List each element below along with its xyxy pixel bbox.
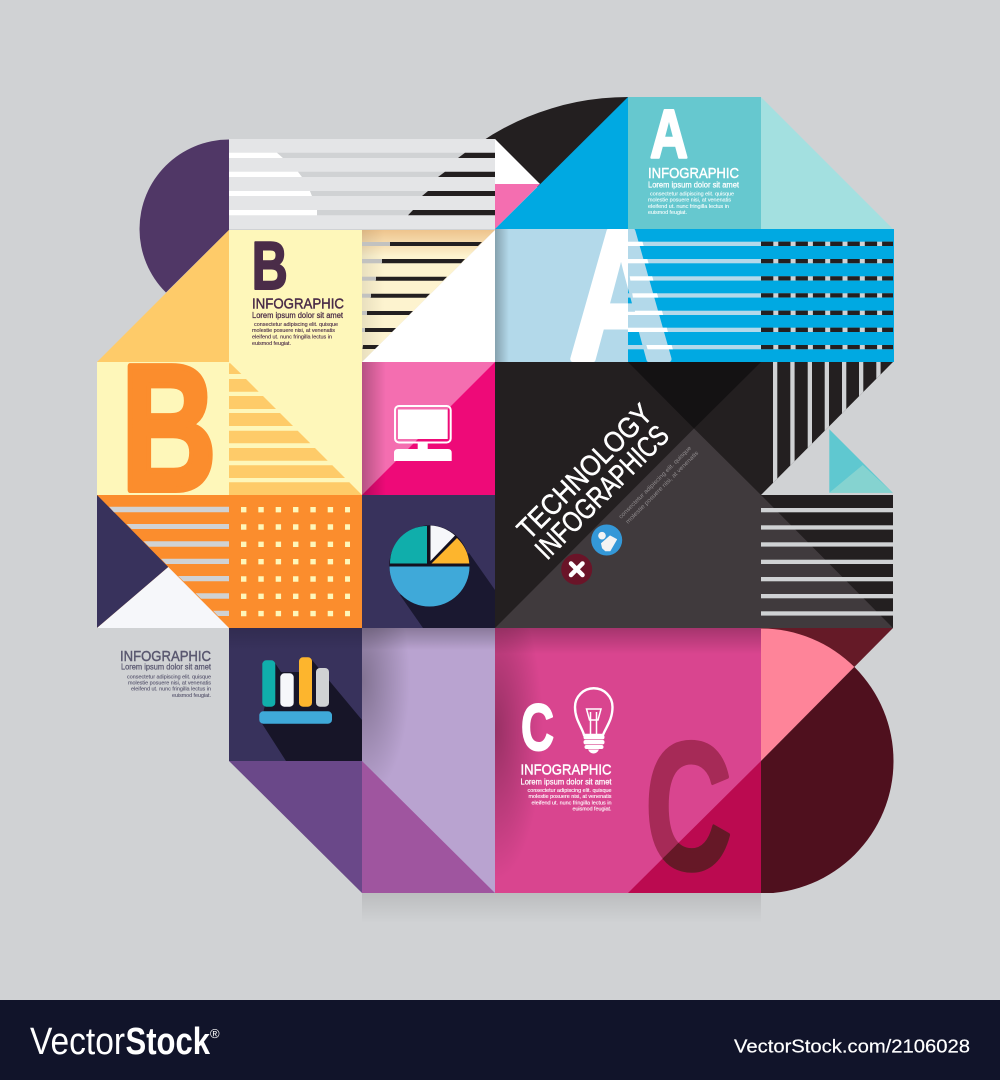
panel: A text block: INFOGRAPHIC	[648, 165, 739, 182]
side text block: INFOGRAPHIC	[120, 648, 211, 665]
panel: purple half circle	[140, 140, 229, 292]
panel: top striped strip	[229, 139, 496, 229]
panel: A text block: A	[650, 96, 688, 173]
pie chart	[389, 525, 470, 606]
panel: B text block: molestie posuere nisi, at venenatis	[252, 328, 335, 334]
text block: C: Lorem ipsum dolor sit amet	[520, 778, 612, 786]
side text block: consectetur adipiscing elit. quisque	[127, 674, 211, 680]
footer logo: Vector	[30, 1021, 125, 1063]
letter: big C	[648, 740, 730, 873]
panel: B text block: Lorem ipsum dolor sit amet	[252, 311, 344, 320]
text block: C: euismod feugiat.	[572, 807, 612, 813]
letter: big white A: A	[569, 193, 673, 399]
panel: B text block: INFOGRAPHIC	[252, 295, 344, 312]
panel: big B square: B	[121, 328, 216, 529]
panel: lavender fold	[362, 628, 495, 893]
panel: A text block: Lorem ipsum dolor sit amet	[648, 180, 740, 190]
side text block: Lorem ipsum dolor sit amet	[121, 662, 212, 672]
panel: black wedge with vertical stripes	[761, 362, 893, 495]
panel: B text block: eleifend ut. nunc fringilla lectus in	[252, 335, 332, 341]
panel: B text block: euismod feugiat.	[252, 341, 291, 347]
footer logo	[30, 1021, 220, 1063]
panel: A text block	[628, 96, 761, 229]
text block: C: INFOGRAPHIC	[520, 761, 612, 778]
letter: big white A	[570, 229, 673, 362]
rotated caption: molestie posuere nisi, at venenatis	[625, 450, 700, 525]
panel: B text block: consectetur adipiscing elit. quisque	[254, 322, 338, 328]
letter: small C: C	[521, 690, 554, 764]
panel: A text block: molestie posuere nisi, at venenatis	[648, 198, 731, 204]
panel: A text block: eleifend ut. nunc fringilla lectus in	[648, 204, 729, 210]
panel: central black square	[495, 362, 761, 628]
rotated caption: consectetur adipiscing elit. quisque	[618, 445, 694, 520]
panel: A text block: euismod feugiat.	[648, 210, 687, 216]
panel: blue striped band: A	[569, 193, 673, 399]
side text block: eleifend ut. nunc fringilla lectus in	[131, 687, 211, 693]
footer url: VectorStock.com/2106028	[734, 1036, 970, 1057]
footer bar	[0, 1000, 1000, 1080]
footer logo: ®	[210, 1026, 220, 1041]
panel: light cream striped square	[362, 230, 495, 362]
letter: big C: C	[645, 704, 732, 908]
panel: orange dotted square	[229, 495, 362, 628]
panel: orange stripes triangle	[97, 495, 229, 628]
panel: navy bar chart square	[229, 628, 362, 761]
panel: B text block: B	[252, 228, 288, 304]
panel: maroon half circle	[761, 628, 894, 893]
title: technology infographics: INFOGRAPHICS	[529, 420, 676, 566]
text block: C: consectetur adipiscing elit. quisque	[528, 788, 612, 794]
panel: blue striped band	[628, 229, 894, 362]
panel: white and pink triangles	[495, 139, 540, 229]
panel: black arc wedge	[486, 97, 628, 187]
panel: light teal triangle	[761, 97, 893, 229]
panel: B text block	[229, 228, 362, 362]
text block: C: molestie posuere nisi, at venenatis	[528, 794, 612, 800]
panel: blue triangle	[495, 97, 628, 229]
footer logo: Stock	[126, 1021, 211, 1063]
bar chart icon	[259, 657, 332, 724]
text block: C	[520, 761, 612, 813]
title: technology infographics: TECHNOLOGY	[511, 398, 659, 546]
panel: light blue big A	[495, 229, 628, 362]
panel: magenta C block	[495, 628, 761, 893]
text block: C: eleifend ut. nunc fringilla lectus in	[532, 800, 612, 806]
icon: teal triangle	[829, 429, 893, 493]
icon: close button	[561, 554, 592, 585]
panel: cream square with orange stripes	[229, 362, 362, 495]
panel: pink monitor square	[362, 362, 495, 495]
letter: big C: C	[645, 704, 732, 908]
icon: monitor	[394, 406, 452, 461]
floor shadow	[362, 893, 761, 923]
panel: navy pie chart square	[362, 495, 495, 628]
side text block	[120, 648, 212, 699]
panel: yellow triangle	[97, 230, 229, 362]
panel: purple triangle	[229, 761, 362, 893]
panel: A text block: consectetur adipiscing elit. quisque	[650, 192, 734, 198]
panel: striped black and grey square	[761, 495, 893, 628]
icon: user button	[591, 524, 622, 556]
icon: light bulb	[575, 688, 612, 754]
side text block: euismod feugiat.	[172, 693, 211, 699]
side text block: molestie posuere nisi, at venenatis	[128, 680, 211, 686]
